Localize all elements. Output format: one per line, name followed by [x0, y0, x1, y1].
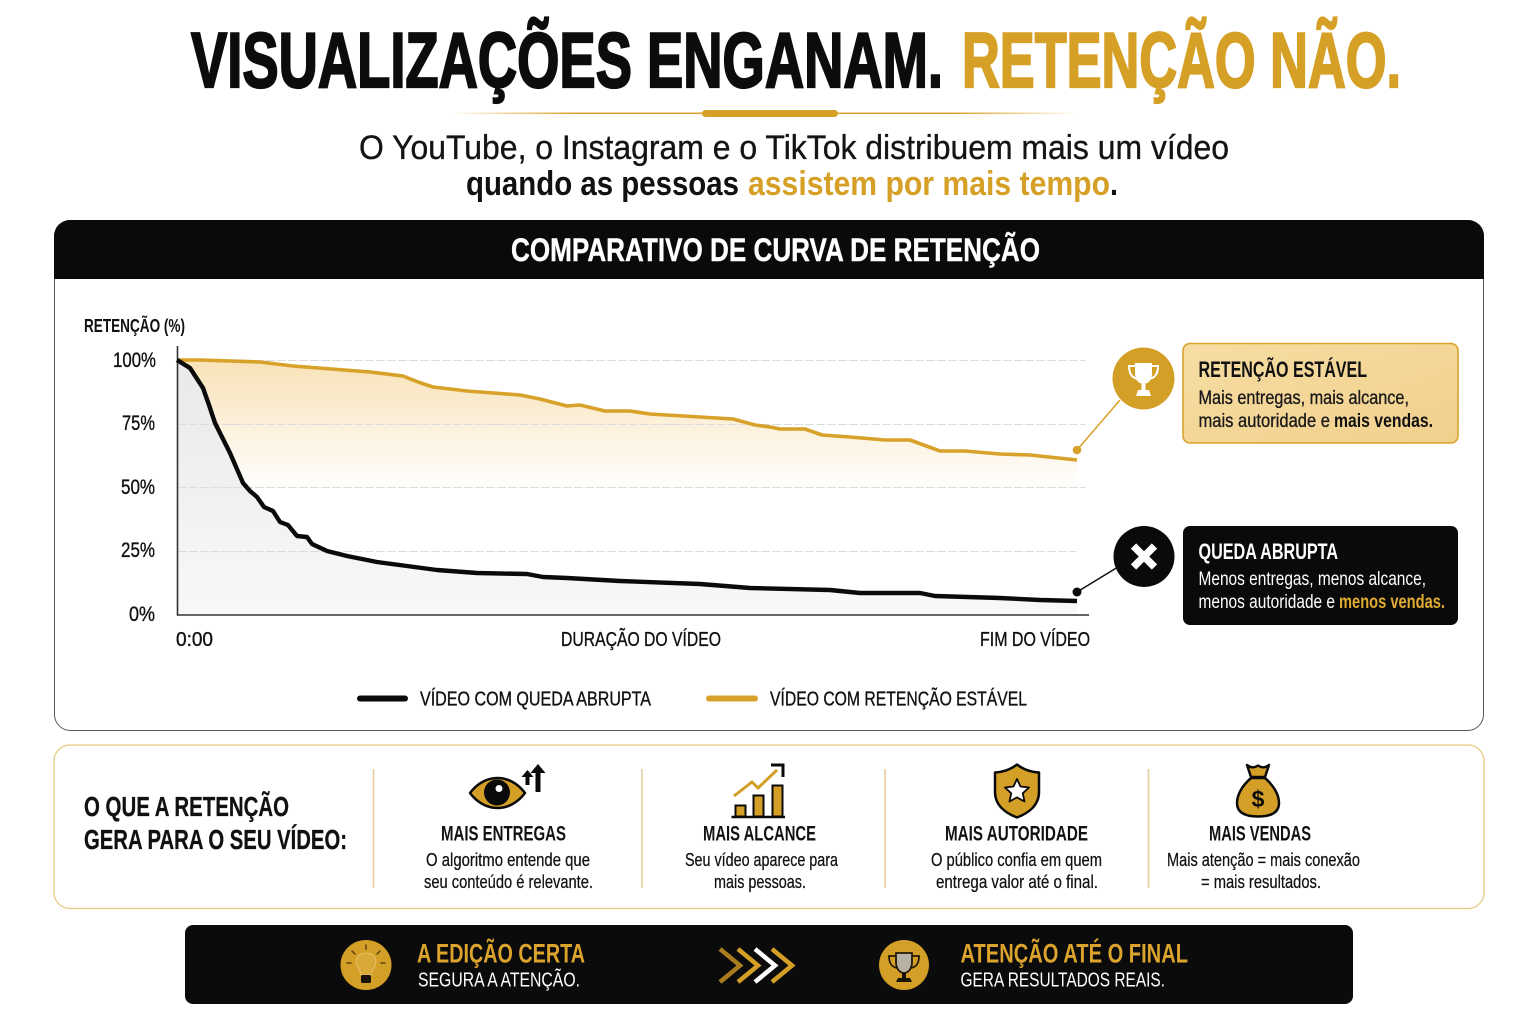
arrows: chevrons: [720, 949, 792, 982]
item: mais alcance: mais pessoas.: [714, 872, 806, 892]
item: mais vendas: [1167, 822, 1360, 892]
panel heading: COMPARATIVO DE CURVA DE RETENÇÃO: [511, 232, 1040, 268]
title: VISUALIZAÇÕES ENGANAM.: [191, 16, 943, 104]
subtitle: quando as pessoas: [466, 165, 739, 203]
item: mais autoridade: entrega valor até o final.: [936, 872, 1098, 892]
panel heading: [84, 791, 347, 855]
x axis labels: FIM DO VÍDEO: [980, 628, 1090, 651]
legend: VÍDEO COM RETENÇÃO ESTÁVEL: [770, 686, 1027, 710]
item: mais vendas: Mais atenção = mais conexão: [1167, 850, 1360, 870]
panel heading: GERA PARA O SEU VÍDEO:: [84, 824, 347, 855]
subtitle: .: [1110, 165, 1118, 203]
x axis labels: DURAÇÃO DO VÍDEO: [561, 627, 721, 651]
callout: stable retention: Mais entregas, mais alcance,: [1198, 388, 1409, 409]
callout: stable retention: mais vendas.: [1334, 411, 1433, 432]
item: mais entregas: O algoritmo entende que: [426, 850, 590, 870]
banner text: right: GERA RESULTADOS REAIS.: [960, 970, 1165, 992]
y axis ticks: 100%: [113, 349, 156, 372]
y axis label: RETENÇÃO (%): [84, 315, 185, 336]
callout: abrupt drop: Menos entregas, menos alcance,: [1198, 569, 1426, 590]
callout: stable retention: RETENÇÃO ESTÁVEL: [1198, 357, 1367, 382]
connector: abrupt drop: [1072, 567, 1118, 596]
callout: abrupt drop: menos vendas.: [1339, 592, 1445, 613]
y axis ticks: 25%: [121, 539, 155, 562]
legend: [360, 686, 1027, 710]
item: mais vendas: MAIS VENDAS: [1209, 822, 1311, 846]
banner text: left: [417, 938, 585, 992]
y axis ticks: [113, 349, 156, 626]
icon: eye with arrows: [470, 764, 546, 808]
callout: stable retention: mais autoridade e: [1198, 411, 1330, 432]
item: mais autoridade: O público confia em quem: [931, 850, 1102, 870]
subtitle: assistem por mais tempo: [748, 165, 1110, 203]
panel: retention curve comparison: [54, 220, 1484, 730]
item: mais alcance: Seu vídeo aparece para: [685, 850, 839, 870]
item: mais entregas: MAIS ENTREGAS: [441, 822, 566, 846]
icon: dark trophy: [879, 940, 929, 990]
item: mais autoridade: MAIS AUTORIDADE: [945, 822, 1088, 846]
y axis ticks: 50%: [121, 476, 155, 499]
callout: abrupt drop: QUEDA ABRUPTA: [1198, 539, 1338, 564]
connector: stable retention: [1073, 400, 1120, 454]
item: mais alcance: MAIS ALCANCE: [703, 822, 816, 846]
icon: rising bar chart: [732, 765, 785, 817]
icon: money bag: [1237, 765, 1279, 816]
y axis ticks: 75%: [122, 412, 155, 435]
black curve: abrupt drop: [177, 360, 1077, 601]
gold curve: stable retention: [178, 360, 1077, 460]
icon: light bulb: [340, 940, 392, 990]
icon: trophy in gold circle: [1112, 348, 1174, 410]
callout: abrupt drop: menos autoridade e: [1198, 592, 1335, 613]
line chart: [177, 346, 1089, 615]
subtitle: O YouTube, o Instagram e o TikTok distribuem mais um vídeo: [359, 129, 1229, 167]
banner text: left: SEGURA A ATENÇÃO.: [418, 968, 580, 992]
item: mais vendas: = mais resultados.: [1201, 872, 1321, 892]
x axis labels: [176, 627, 1090, 651]
banner: bottom call to action: [185, 925, 1353, 1004]
item: mais autoridade: [931, 822, 1102, 892]
icon: x in black circle: [1114, 526, 1174, 587]
icon: money bag: $: [1252, 786, 1265, 812]
y axis ticks: 0%: [129, 603, 155, 626]
callout: stable retention: [1183, 344, 1458, 443]
legend: VÍDEO COM QUEDA ABRUPTA: [420, 688, 652, 710]
panel heading: O QUE A RETENÇÃO: [84, 791, 289, 822]
banner text: right: ATENÇÃO ATÉ O FINAL: [960, 938, 1188, 968]
panel: what retention generates: [54, 745, 1484, 908]
banner text: left: A EDIÇÃO CERTA: [417, 938, 585, 968]
subtitle: [359, 129, 1229, 203]
icon: shield with star: [995, 764, 1039, 818]
callout: abrupt drop: [1183, 526, 1458, 625]
item: mais entregas: seu conteúdo é relevante.: [424, 872, 593, 892]
item: mais entregas: [424, 822, 593, 892]
x axis labels: 0:00: [176, 629, 213, 651]
banner text: right: [960, 938, 1188, 992]
item: mais alcance: [685, 822, 839, 892]
